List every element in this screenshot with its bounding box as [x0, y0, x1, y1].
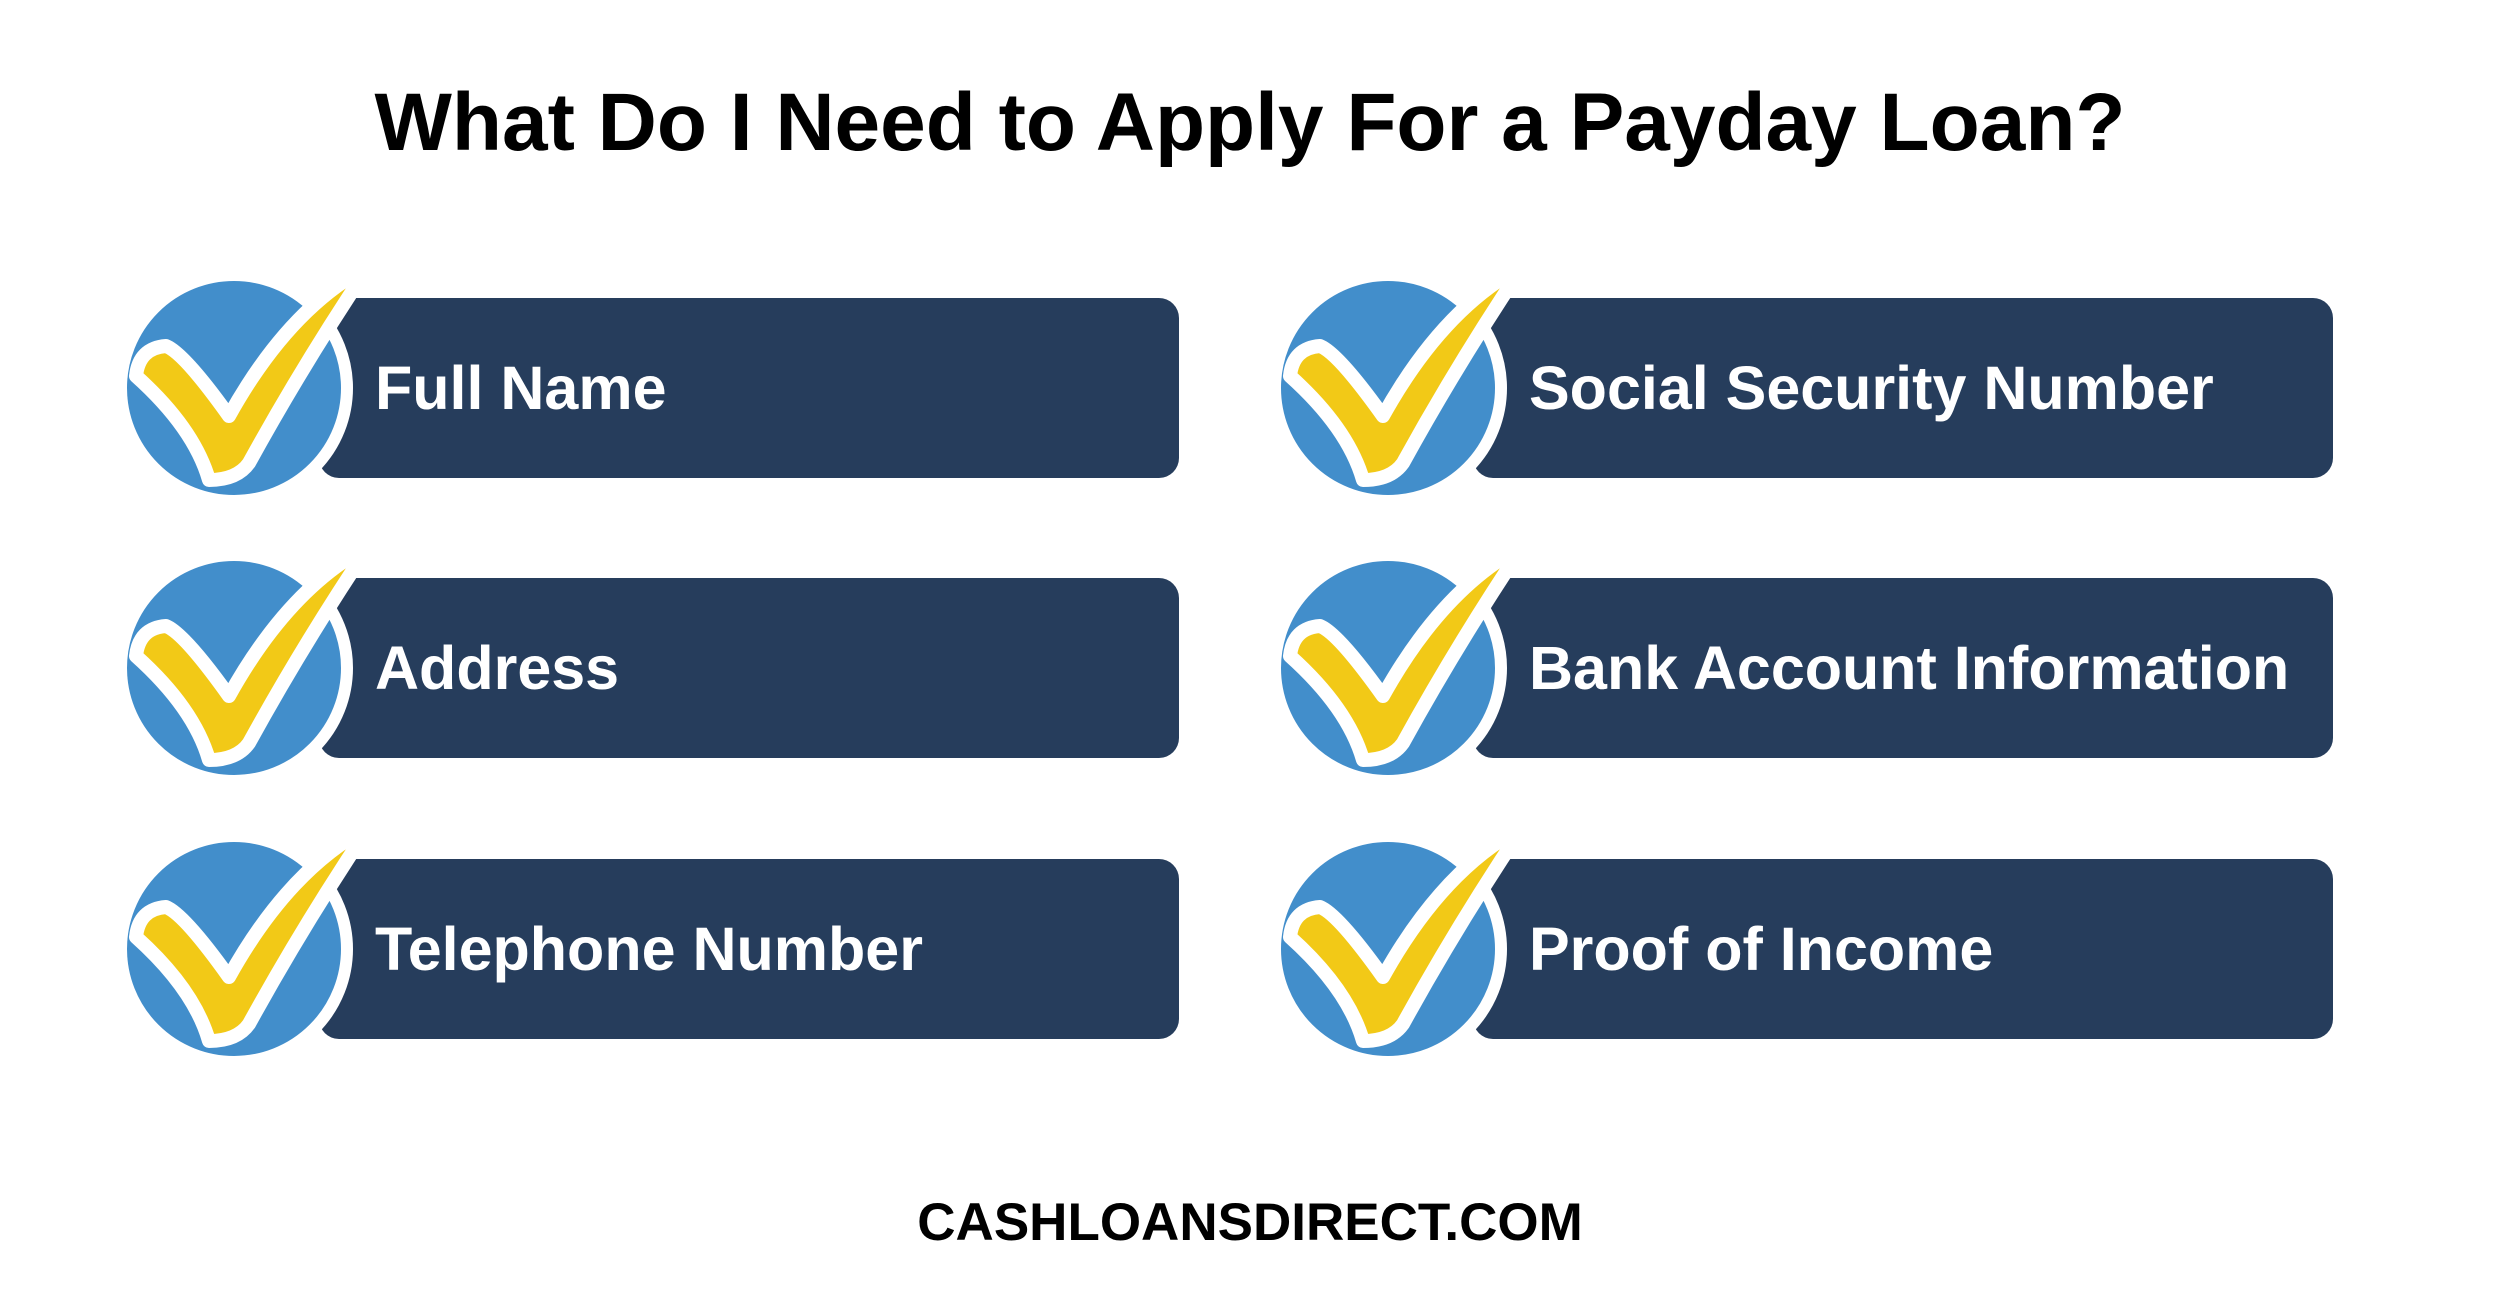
title: What Do I Need to Apply For a Payday Loan?	[374, 77, 2126, 168]
item: Social Security Number	[1281, 281, 2333, 495]
icon: checkmark	[127, 281, 356, 495]
item: Address	[127, 561, 1179, 775]
item: Full Name: Full Name	[375, 354, 667, 422]
item: Social Security Number: Social Security Number	[1529, 354, 2214, 422]
item: Bank Account Information	[1281, 561, 2333, 775]
item: Proof of Income: Proof of Income	[1529, 915, 1993, 983]
icon: checkmark	[127, 842, 356, 1056]
icon: checkmark	[1281, 561, 1510, 775]
item: Address: Address	[375, 634, 619, 702]
footer: CASHLOANSDIRECT.COM	[917, 1193, 1583, 1252]
item: Telephone Number	[127, 842, 1179, 1056]
item: Full Name	[127, 281, 1179, 495]
icon: checkmark	[1281, 281, 1510, 495]
icon: checkmark	[127, 561, 356, 775]
item: Bank Account Information: Bank Account Information	[1529, 634, 2289, 702]
item: Telephone Number: Telephone Number	[375, 915, 923, 983]
item: Proof of Income	[1281, 842, 2333, 1056]
icon: checkmark	[1281, 842, 1510, 1056]
